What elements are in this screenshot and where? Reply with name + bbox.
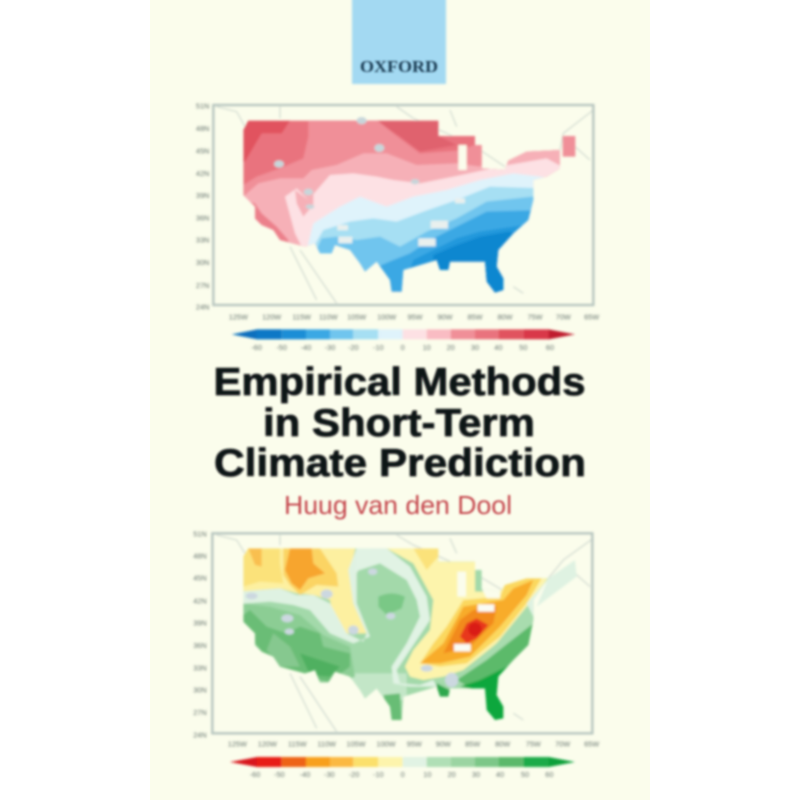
longitude axis labels: 90W — [436, 740, 451, 749]
publisher panel: Oxford: OXFORD — [360, 57, 438, 76]
colour bar labels: 0 — [401, 343, 405, 352]
latitude axis labels: 24N — [193, 730, 207, 739]
longitude axis labels: 80W — [497, 312, 513, 321]
colour bar labels: 40 — [494, 343, 502, 352]
colour bar labels: 0 — [401, 770, 405, 779]
latitude axis labels: 51N — [196, 102, 209, 111]
longitude axis labels: 115W — [288, 740, 307, 749]
latitude axis labels: 24N — [196, 302, 209, 311]
latitude axis labels: 36N — [196, 214, 209, 223]
Maine patch — [563, 136, 575, 157]
map frame — [213, 105, 593, 305]
longitude axis labels: 120W — [258, 740, 277, 749]
colour bar labels: -40 — [300, 770, 310, 779]
longitude axis labels: 75W — [526, 740, 541, 749]
station markers — [274, 117, 419, 209]
station markers — [246, 568, 458, 687]
precipitation contour bands — [242, 546, 548, 722]
colour bar labels: 60 — [545, 770, 553, 779]
latitude axis labels: 39N — [193, 618, 207, 627]
longitude axis labels: 125W — [228, 740, 247, 749]
longitude axis labels: 75W — [527, 312, 543, 321]
book cover panel — [150, 0, 650, 800]
latitude axis labels: 36N — [193, 641, 207, 650]
longitude axis labels: 115W — [292, 312, 311, 321]
chart: temperature map — [196, 102, 599, 352]
latitude axis labels: 48N — [193, 552, 207, 561]
longitude axis labels: 95W — [407, 740, 422, 749]
colour bar labels: 40 — [496, 770, 504, 779]
latitude axis labels: 42N — [193, 596, 207, 605]
title: Empirical Methods — [214, 361, 586, 404]
temperature contour bands — [242, 118, 562, 294]
colour bar labels: -20 — [348, 343, 359, 352]
longitude axis labels: 65W — [584, 740, 599, 749]
longitude axis labels: 105W — [346, 740, 366, 749]
latitude axis labels: 30N — [193, 686, 207, 695]
longitude axis labels: 120W — [262, 312, 281, 321]
latitude axis labels: 33N — [193, 663, 207, 672]
latitude axis labels: 39N — [196, 191, 209, 200]
colour bar labels — [251, 343, 554, 352]
chart: precipitation map — [193, 530, 599, 779]
colour bar — [232, 329, 575, 339]
colour bar labels: 30 — [471, 343, 479, 352]
latitude axis labels: 48N — [196, 124, 209, 133]
title: Climate Prediction — [214, 442, 586, 485]
longitude axis labels: 70W — [556, 312, 571, 321]
publisher panel: Oxford — [352, 0, 446, 84]
longitude axis labels: 80W — [495, 740, 510, 749]
title — [214, 361, 586, 485]
colour bar labels: -10 — [373, 343, 384, 352]
author: Huug van den Dool — [284, 490, 512, 520]
map outlines — [217, 107, 593, 303]
longitude axis labels: 95W — [407, 312, 423, 321]
longitude axis labels: 65W — [584, 312, 599, 321]
longitude axis labels — [229, 312, 599, 321]
latitude axis labels — [193, 530, 207, 739]
colour bar labels: 50 — [521, 770, 529, 779]
map outlines — [217, 535, 593, 732]
title: in Short-Term — [263, 402, 535, 445]
latitude axis labels: 27N — [193, 708, 207, 717]
New England patch — [537, 560, 577, 607]
latitude axis labels: 30N — [196, 258, 209, 267]
colour bar labels: -20 — [349, 770, 359, 779]
colour bar labels: 10 — [423, 343, 431, 352]
colour bar labels: -40 — [301, 343, 311, 352]
latitude axis labels: 33N — [196, 236, 209, 245]
latitude axis labels: 45N — [193, 574, 207, 583]
colour bar labels: -60 — [251, 343, 262, 352]
longitude axis labels: 125W — [229, 312, 248, 321]
colour bar labels: -30 — [325, 343, 335, 352]
longitude axis labels — [228, 740, 599, 749]
longitude axis labels: 85W — [467, 312, 483, 321]
colour bar labels: -30 — [324, 770, 335, 779]
latitude axis labels: 51N — [193, 530, 207, 539]
longitude axis labels: 110W — [317, 740, 336, 749]
longitude axis labels: 110W — [319, 312, 338, 321]
longitude axis labels: 100W — [377, 312, 396, 321]
colour bar labels: 20 — [447, 343, 455, 352]
longitude axis labels: 70W — [555, 740, 570, 749]
latitude axis labels: 45N — [196, 146, 209, 155]
colour bar labels: 30 — [472, 770, 480, 779]
colour bar labels: -50 — [274, 770, 285, 779]
colour bar labels: 10 — [423, 770, 431, 779]
latitude axis labels — [196, 102, 209, 311]
colour bar labels: -50 — [276, 343, 287, 352]
longitude axis labels: 90W — [437, 312, 453, 321]
colour bar labels: 50 — [519, 343, 527, 352]
latitude axis labels: 42N — [196, 169, 209, 178]
colour bar labels: -60 — [250, 770, 260, 779]
longitude axis labels: 105W — [347, 312, 366, 321]
colour bar labels: -10 — [373, 770, 384, 779]
longitude axis labels: 85W — [465, 740, 480, 749]
colour bar labels: 20 — [448, 770, 456, 779]
colour bar — [230, 757, 575, 767]
colour bar labels — [250, 770, 553, 779]
longitude axis labels: 100W — [376, 740, 396, 749]
colour bar labels: 60 — [546, 343, 554, 352]
latitude axis labels: 27N — [196, 281, 209, 290]
map frame — [212, 533, 592, 733]
